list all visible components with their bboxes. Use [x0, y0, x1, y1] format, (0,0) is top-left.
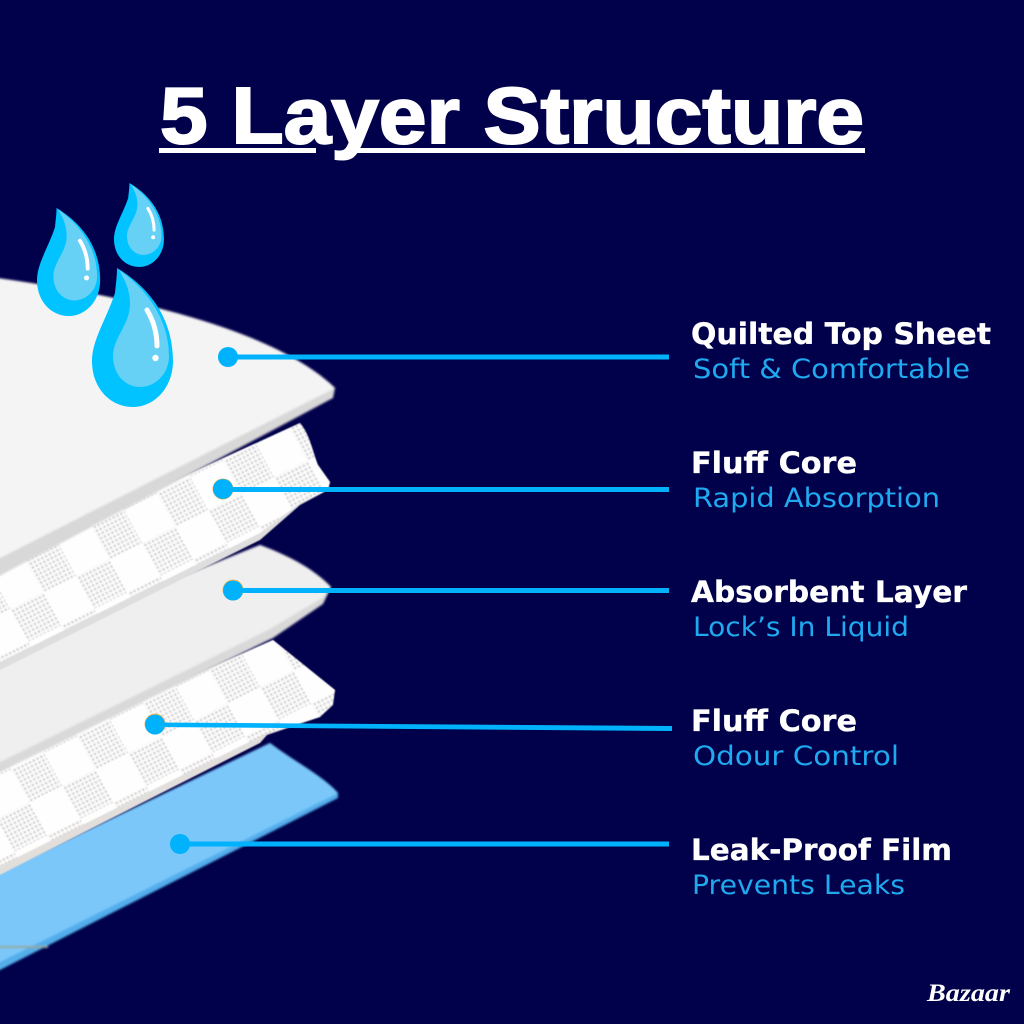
callout: quilted top sheet	[218, 317, 991, 385]
layer: lower fluff core	[0, 640, 335, 880]
callout: fluff core odour control: Odour Control	[693, 741, 899, 772]
callout: fluff core rapid absorption	[212, 446, 940, 514]
callout: absorbent layer: Lock’s In Liquid	[693, 612, 909, 643]
callout: quilted top sheet: Quilted Top Sheet	[691, 317, 991, 351]
callout: quilted top sheet: Soft & Comfortable	[693, 354, 970, 385]
callout: absorbent layer	[222, 575, 968, 643]
callout: leak-proof film	[170, 833, 952, 901]
brand logo: Bazaar	[926, 980, 1010, 1007]
callout: fluff core rapid absorption: Fluff Core	[691, 446, 857, 480]
layer: upper fluff core	[0, 423, 330, 675]
icon: water drop left	[37, 208, 100, 316]
callout: leak-proof film: Prevents Leaks	[692, 870, 905, 901]
title: 5 Layer Structure	[160, 71, 864, 160]
callout: leak-proof film: Leak-Proof Film	[691, 833, 952, 867]
callout: absorbent layer: Absorbent Layer	[691, 575, 968, 609]
layer: absorbent layer	[0, 545, 331, 777]
icon: water drop right	[114, 183, 164, 267]
callout: fluff core odour control: Fluff Core	[691, 704, 857, 738]
callout: fluff core rapid absorption: Rapid Absorption	[693, 483, 940, 514]
icon: water drop large	[92, 268, 173, 407]
layer: leak-proof film	[0, 743, 338, 975]
layer: quilted top sheet	[0, 277, 335, 581]
illustration: layered pad	[0, 277, 338, 975]
callout: fluff core odour control	[144, 704, 899, 772]
